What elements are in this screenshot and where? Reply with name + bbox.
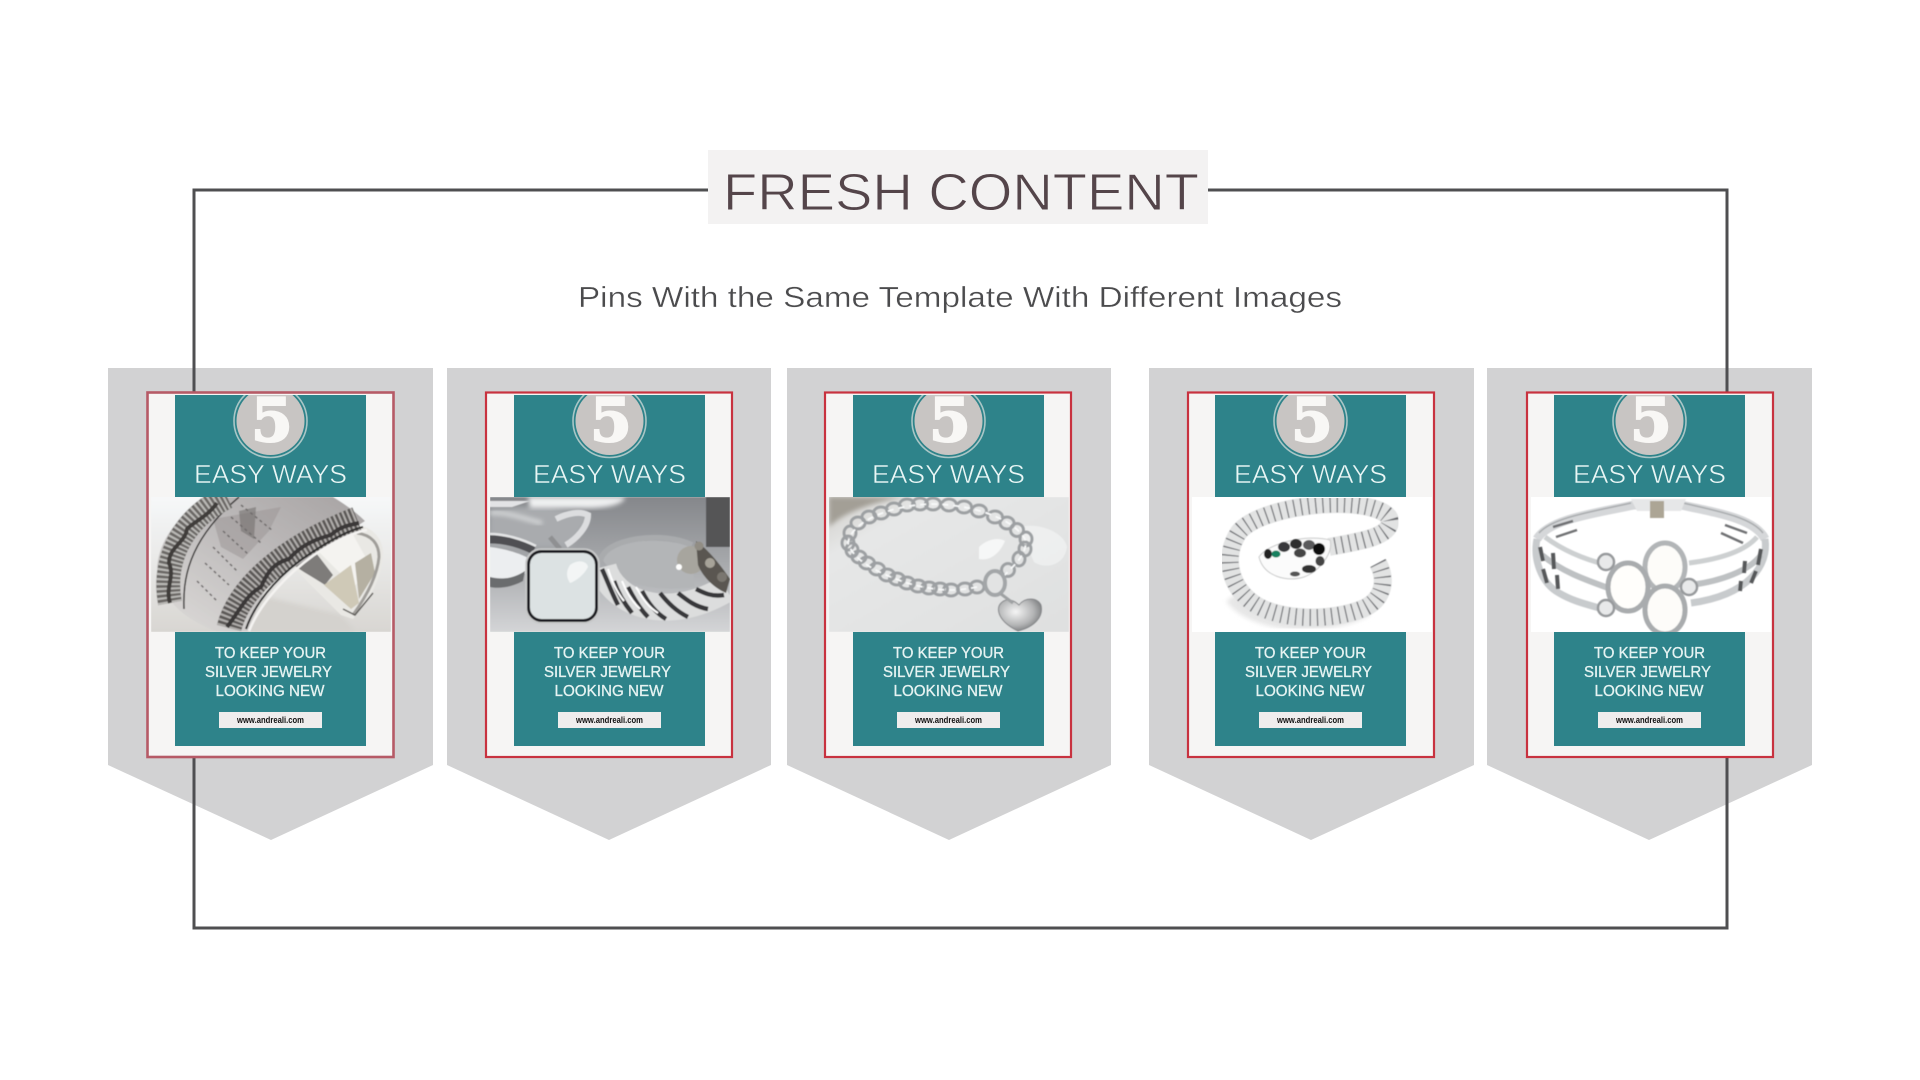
photo: pearl bangle <box>1531 497 1771 634</box>
pin 3: chain bracelet <box>825 384 1071 757</box>
pin 4: snake bracelet: TO KEEP YOUR <box>1255 645 1366 662</box>
photo: silver cuff <box>151 497 391 632</box>
pin 5: pearl bangle: www.andreali.com <box>1615 715 1683 725</box>
subtitle: Pins With the Same Template With Different Images <box>578 282 1342 314</box>
pin 2: rings: LOOKING NEW <box>554 683 664 700</box>
pin 2: rings: TO KEEP YOUR <box>554 645 665 662</box>
pin 3: chain bracelet: 5 <box>929 386 971 456</box>
banner 5 <box>1487 368 1812 840</box>
pin 2: rings: SILVER JEWELRY <box>544 664 671 681</box>
pin 5: pearl bangle <box>1527 384 1773 757</box>
pin 5: pearl bangle: SILVER JEWELRY <box>1584 664 1711 681</box>
title: FRESH CONTENT <box>723 164 1199 222</box>
pin 4: snake bracelet: 5 <box>1291 386 1333 456</box>
photo: snake bracelet <box>1192 497 1432 632</box>
pin 4: snake bracelet <box>1188 384 1434 757</box>
banner 1 <box>108 368 433 840</box>
pin 5: pearl bangle: LOOKING NEW <box>1594 683 1704 700</box>
pin 2: rings: 5 <box>590 386 632 456</box>
pin 1: cuff: TO KEEP YOUR <box>215 645 326 662</box>
pin 1: cuff: SILVER JEWELRY <box>205 664 332 681</box>
pin 5: pearl bangle: TO KEEP YOUR <box>1594 645 1705 662</box>
pin 3: chain bracelet: TO KEEP YOUR <box>893 645 1004 662</box>
pin 3: chain bracelet: LOOKING NEW <box>894 683 1003 700</box>
pin 2: rings: EASY WAYS <box>533 459 686 489</box>
pin 4: snake bracelet: SILVER JEWELRY <box>1245 664 1372 681</box>
banner 2 <box>447 368 771 840</box>
outline frame <box>194 190 1727 928</box>
photo: chain bracelet with heart <box>829 497 1069 632</box>
pin 5: pearl bangle: EASY WAYS <box>1573 459 1726 489</box>
pin 4: snake bracelet: www.andreali.com <box>1276 715 1344 725</box>
pin 2: rings: www.andreali.com <box>575 715 643 725</box>
banner 3 <box>787 368 1111 840</box>
pin 2: rings <box>486 384 732 757</box>
pin 3: chain bracelet: SILVER JEWELRY <box>883 664 1010 681</box>
pin 1: cuff: 5 <box>251 386 293 456</box>
photo: silver rings <box>490 497 730 632</box>
pin 3: chain bracelet: EASY WAYS <box>872 459 1025 489</box>
pin 4: snake bracelet: EASY WAYS <box>1234 459 1387 489</box>
pin 5: pearl bangle: 5 <box>1630 386 1672 456</box>
pin 1: cuff <box>148 384 394 757</box>
pin 3: chain bracelet: www.andreali.com <box>914 715 982 725</box>
pin 4: snake bracelet: LOOKING NEW <box>1256 683 1365 700</box>
pin 1: cuff: EASY WAYS <box>194 459 347 489</box>
title <box>708 150 1208 224</box>
pin 1: cuff: LOOKING NEW <box>216 683 325 700</box>
pin 1: cuff: www.andreali.com <box>236 715 304 725</box>
banner 4 <box>1149 368 1474 840</box>
